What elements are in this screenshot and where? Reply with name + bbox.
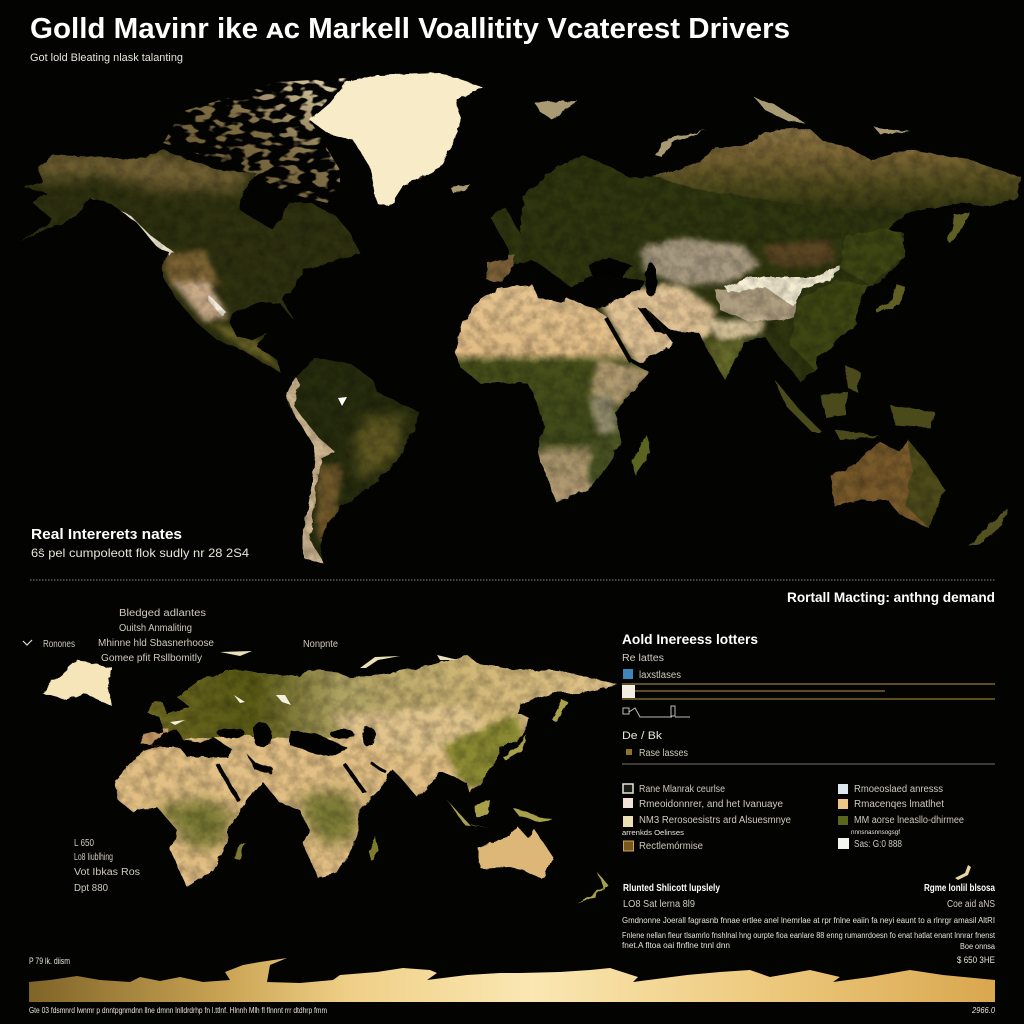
left Africa olive xyxy=(150,798,235,850)
footer note: Gte 03 fdsmnrd lwnmr p dnntpgnmdnn llne dmnn lnlldrdrhp fn l.ttlnf. Hlnnh Mlh fl flnnnt rrr dtdhrp fmm xyxy=(29,1006,327,1015)
subtitle: Got lold Bleating nlask talanting xyxy=(30,52,183,64)
legend icons xyxy=(623,784,849,851)
India xyxy=(702,320,765,342)
Eurasian band xyxy=(140,655,617,744)
map: Eurasia and Africa landmass xyxy=(110,650,630,890)
icon: white spot xyxy=(338,397,347,406)
seas xyxy=(140,722,376,773)
map: Japan and Kamchatka xyxy=(875,212,970,313)
notes block: Fnlene nellan fleur tlsamrlo fnshlnal hng ourpte fioa eanlare 88 enng rumanrdoesn fo enat hatlat enant lnnrar fnenst xyxy=(622,931,996,940)
map: Greenland xyxy=(310,73,483,207)
dotted divider xyxy=(30,579,995,581)
labels: Bledged adlantes xyxy=(119,608,206,619)
seas xyxy=(589,258,633,279)
Iran and Arabia xyxy=(596,283,716,368)
notes block: Rlunted Shlicott lupslely xyxy=(623,882,720,894)
legend right labels xyxy=(851,784,964,850)
notes block: fnet.A fltoa oai flnflne tnnl dnn xyxy=(622,941,730,950)
legend xyxy=(622,784,964,852)
label: laxstlases xyxy=(639,670,681,681)
icon: small gold island xyxy=(955,865,971,880)
legend left labels: NM3 Rerosoesistrs ard Alsuesmnye xyxy=(639,815,791,826)
Kazakh steppe xyxy=(640,238,760,285)
labels: Gomee pfit Rsllbomitly xyxy=(101,653,202,664)
gold strip: Antarctica xyxy=(29,958,995,1002)
map: North America xyxy=(20,150,360,373)
East China xyxy=(790,280,870,370)
notes block: Gmdnonne Joerall fagrasnb fnnae ertlee anel lnemrlae at rpr fnlne eaiin fa neyi eaunt to a rlnrgr amasil AltRI xyxy=(622,916,995,925)
section subheading: 6ŝ pel cumpoleott flok sudly nr 28 2S4 xyxy=(31,546,249,560)
Himalaya cream ridge xyxy=(725,263,845,307)
mini chart xyxy=(623,706,690,717)
lower world map xyxy=(42,650,630,903)
map: islands xyxy=(447,700,568,827)
icon: gold square xyxy=(626,749,632,755)
legend left labels: Rectlemórmise xyxy=(639,841,703,852)
right Africa olive xyxy=(300,790,360,845)
map: Red Sea xyxy=(606,318,631,362)
title: Golld Mavinr ike ᴀc Markell Voallitity Vcaterest Drivers xyxy=(30,13,790,45)
panel: gold interest letters xyxy=(622,631,995,764)
Mongolia xyxy=(765,240,835,268)
map: Australia xyxy=(830,440,945,527)
map: white highlights xyxy=(170,695,291,725)
label: strip scale: P 79 lk. diism xyxy=(29,956,70,966)
left labels above map xyxy=(23,608,338,664)
map: Arctic islands xyxy=(220,651,458,668)
map: Australia xyxy=(477,827,553,880)
left labels lower xyxy=(74,838,140,894)
panel heading: Aold Inereess lotters xyxy=(622,631,758,647)
map: Indonesia xyxy=(775,365,935,440)
icon: blue square xyxy=(623,669,633,679)
central Asia tan xyxy=(330,704,486,748)
Spain xyxy=(486,254,514,282)
section heading: real interest rates: Real Intereretɜ nates xyxy=(31,526,182,543)
South-East Asia olive xyxy=(443,715,525,790)
legend right labels: MM aorse lneasllo-dhirmee xyxy=(854,815,964,826)
map: Arctic and Pacific islands xyxy=(450,97,911,192)
labels: Ronones xyxy=(43,639,75,650)
legend right labels: Rmoeoslaed anresss xyxy=(854,784,943,795)
map: Madagascars xyxy=(234,837,378,861)
map: South America xyxy=(286,358,420,564)
label: Re lattes xyxy=(622,653,664,664)
labels: Mhinne hld Sbasnerhoose xyxy=(98,638,214,649)
legend left labels: Rmeoidonnrer, and het Ivanuaye xyxy=(639,799,783,810)
map: Eurasia xyxy=(480,120,1024,390)
left labels lower: Lo8 Iiublhing xyxy=(74,852,113,863)
notes block: LO8 Sat lerna 8l9 xyxy=(623,899,695,910)
footer value: 2966.0 xyxy=(971,1006,996,1015)
chart lines xyxy=(622,684,995,699)
left labels lower: Vot Ibkas Ros xyxy=(74,867,140,878)
left labels lower: L 650 xyxy=(74,838,94,849)
map: Canadian Arctic islands xyxy=(163,78,347,203)
top world map xyxy=(10,73,1024,570)
Tibet plateau xyxy=(715,285,800,322)
map: New Zealand xyxy=(577,873,608,903)
legend left labels xyxy=(622,784,791,852)
legend left labels: arrenkds Oelinses xyxy=(622,830,685,837)
notes block: Coe aid aNS xyxy=(947,899,995,910)
legend left labels: Rane Mlanrak ceurlse xyxy=(639,784,725,795)
north Asia tone xyxy=(650,120,1024,215)
notes block: Rgme lonlil blsosa xyxy=(924,882,995,894)
Spain xyxy=(140,728,168,750)
left labels lower: Dpt 880 xyxy=(74,883,108,894)
notes block xyxy=(622,882,996,965)
icon: white box xyxy=(622,685,635,698)
map: New Zealand xyxy=(968,508,1008,545)
map: Africa xyxy=(454,284,649,502)
legend right labels: Rmacenqes lmatlhet xyxy=(854,799,944,810)
label: Rase lasses xyxy=(639,748,688,759)
map: Alaska fragment xyxy=(42,660,113,707)
labels: Ouitsh Anmaliting xyxy=(119,623,192,634)
label: De / Bk xyxy=(622,730,663,742)
notes block: $ 650 3HE xyxy=(957,955,995,965)
legend right labels: nnnsnasnnsogsgf xyxy=(851,830,900,836)
check mark icon xyxy=(23,640,32,645)
map: Madagascar xyxy=(632,435,650,475)
heading: retail demand: Rortall Macting: anthng demand xyxy=(787,589,995,605)
legend right labels: Sas: G:0 888 xyxy=(854,839,902,850)
labels: Nonpnte xyxy=(303,639,338,650)
labels xyxy=(43,608,338,664)
notes block: Boe onnsa xyxy=(960,942,995,951)
